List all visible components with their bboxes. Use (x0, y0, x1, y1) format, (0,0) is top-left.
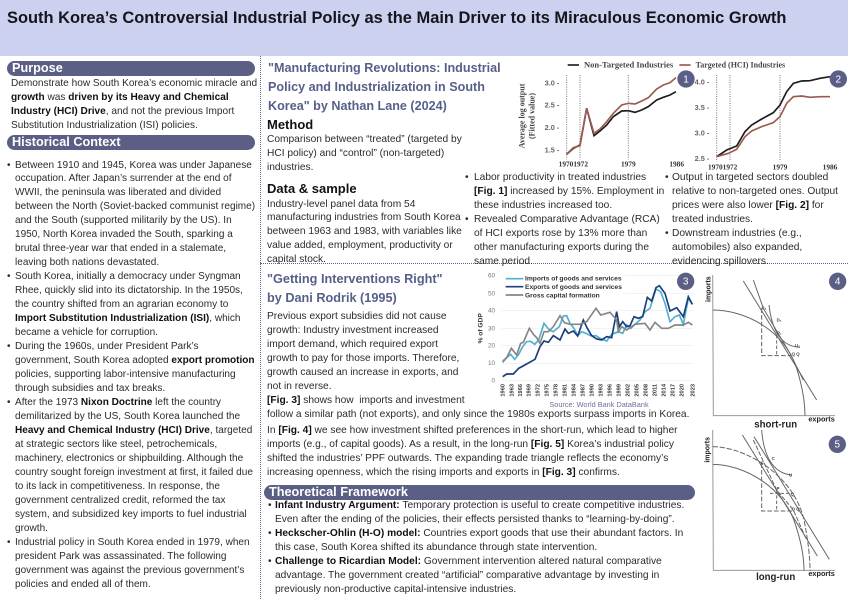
figure 2: output: 1979 (773, 162, 788, 171)
study title: by Dani Rodrik (1995) (267, 291, 397, 305)
panel: Rodrik 1995 study (267, 272, 689, 478)
figure 2: output: 1986 (823, 162, 838, 171)
year axis labels: 2020 (679, 384, 685, 397)
findings text: figure 2: relative to non-targeted ones. Output (672, 186, 838, 197)
figure 1: average log output: 1.5 - (545, 146, 560, 155)
point labels: P (777, 486, 780, 491)
explanation text: Previous export subsidies did not cause (267, 311, 447, 322)
findings text: figure 1: same period. (474, 256, 533, 267)
figure 1: average log output: Average log output (517, 83, 526, 148)
data and sample text: Industry-level panel data from 54 (267, 198, 415, 210)
heading: method: Method (267, 117, 313, 132)
axis label: exports: exports (808, 415, 835, 424)
findings text: figure 1: Revealed Comparative Advantage (RCA) (474, 214, 660, 225)
theory bullet list: • (268, 556, 272, 567)
data and sample text (267, 198, 462, 265)
historical context bullet list: • (7, 341, 11, 352)
year axis labels: 2008 (643, 384, 649, 397)
badge 3 (677, 273, 694, 290)
findings text: figure 2: evidencing spillovers. (672, 256, 769, 267)
source note: Source: World Bank DataBank (549, 400, 649, 409)
theory bullet list: this case, South Korea shifted its abundance through state intervention. (275, 542, 597, 553)
method text: industries. (267, 162, 313, 172)
historical context bullet list: president Park was assassinated. The following (15, 551, 226, 562)
figure 1: average log output (517, 75, 684, 168)
heading: data and sample: Data & sample (267, 180, 357, 196)
findings text: figure 2: Output in targeted sectors doubled (672, 172, 828, 183)
historical context bullet list: WWII, the peninsula was liberated and divided (15, 187, 221, 198)
figure explanation text: In [Fig. 4] we see how investment shifted preferences in the short-run, which lead to higher (267, 425, 678, 436)
point labels (762, 305, 800, 357)
heading: theoretical framework: Theoretical Framework (269, 485, 408, 499)
purpose text: Substitution Industrialization (ISI) policies. (11, 120, 198, 131)
theory bullet list: Challenge to Ricardian Model: Government intervention altered natural comparative (275, 556, 662, 567)
point labels: Q Q (792, 507, 800, 512)
study title: Policy and Industrialization in South (268, 80, 485, 94)
historical context bullet list: Between 1910 and 1945, Korea was under Japanese (15, 160, 252, 170)
year axis labels: 2014 (661, 383, 667, 397)
figure 1: average log output: 1979 (621, 159, 636, 168)
figure 5: long-run PPF diagram (704, 430, 846, 583)
year axis labels: 1978 (553, 384, 559, 397)
study title: Korea" by Nathan Lane (2024) (268, 99, 447, 113)
historical context bullet list: the country shifted from an agrarian economy to (15, 299, 228, 310)
purpose text: growth was driven by its Heavy and Chemical (11, 92, 229, 103)
figure 3: trade and investment share of GDP: 50 (488, 290, 495, 297)
point labels: D₁ (777, 318, 782, 323)
header banner with title (0, 0, 848, 56)
year axis labels: 2017 (670, 384, 676, 397)
badge 3: 3 (683, 277, 689, 288)
panel: theoretical framework (264, 485, 695, 595)
explanation text: follow a similar path (not exports), and only since the 1980s exports surpass imports in Korea. (267, 409, 689, 420)
figure 2: output: 3.0 - (695, 129, 710, 138)
axis label: imports: imports (705, 276, 712, 302)
point labels: U (789, 473, 792, 478)
figure 3: trade and investment share of GDP: 0 (491, 378, 495, 385)
findings text: figure 2: automobiles) also expanded, (672, 242, 802, 253)
year axis labels: 1966 (518, 384, 524, 397)
theory bullet list: • (268, 528, 272, 539)
historical context bullet list: demilitarized by the US, South Korea launched the (15, 411, 240, 422)
findings text: figure 2: • (665, 228, 669, 239)
heading: purpose (7, 61, 255, 76)
explanation text: not in reverse. (267, 381, 332, 392)
chart legend: Targeted (HCI) Industries (696, 61, 785, 70)
heading: theoretical framework (264, 485, 695, 500)
figure 3: trade and investment share of GDP: 60 (488, 273, 495, 280)
figure 3: trade and investment share of GDP: % of GDP (478, 313, 485, 343)
badge 1: 1 (683, 74, 689, 85)
year axis labels (501, 383, 696, 397)
method text: HCI policy) and “control” (non-targeted) (267, 148, 444, 158)
findings text: figure 2: treated industries. (672, 214, 753, 225)
theory bullet list: previously non-productive capital-intensive industries. (275, 584, 516, 595)
historical context bullet list: Heavy and Chemical Industry (HCI) Drive, targeted (15, 425, 252, 436)
chart legend: Gross capital formation (525, 292, 600, 299)
point labels (761, 456, 800, 512)
figure 1: average log output: 2.0 - (545, 123, 560, 132)
point labels: Q Q (792, 352, 800, 357)
title: South Korea’s Controversial Industrial Policy as the Main Driver to its Miraculous Economic Growth (7, 9, 786, 27)
badge 5: 5 (835, 440, 841, 451)
point labels: C (772, 456, 775, 461)
caption: long-run: long-run (756, 572, 795, 583)
figure 1: average log output: 1986 (669, 159, 684, 168)
figure 2: output: 4.0 - (695, 78, 710, 87)
figure 2: output (695, 75, 838, 171)
historical context bullet list: government centralized credit, reformed the tax (15, 495, 226, 506)
findings text: figure 1 (465, 172, 664, 267)
figure 1: average log output: 19701972 (559, 159, 588, 168)
historical context bullet list: policies and ended all of them. (15, 579, 151, 590)
study title (268, 60, 501, 113)
explanation text: import demand, which required export (267, 339, 438, 350)
findings text: figure 1: • (465, 214, 469, 225)
purpose text (11, 78, 257, 131)
line charts: figures 1 and 2 (517, 60, 847, 171)
historical context bullet list: • (7, 537, 11, 548)
badge 1 (677, 70, 695, 88)
findings text: figure 2: prices were also lower [Fig. 2] for (672, 200, 824, 211)
figure 1: average log output: 3.0 - (545, 78, 560, 87)
findings text: figure 1: of HCI exports rose by 13% more than (474, 228, 647, 239)
year axis labels: 1999 (616, 384, 622, 397)
findings text: figure 2: • (665, 172, 669, 183)
year axis labels: 1993 (598, 384, 604, 397)
historical context bullet list: During the 1960s, under President Park’s (15, 341, 199, 352)
figure 3: trade and investment share of GDP (478, 272, 696, 409)
method text: Comparison between “treated” (targeted by (267, 134, 462, 144)
historical context bullet list: 1950, North Korea invaded the South, sparking a (15, 229, 233, 240)
theory bullet list: advantage. The government created “artificial” comparative advantage by investing in (275, 570, 659, 581)
data and sample text: manufacturing industries from South Korea (267, 212, 461, 223)
chart legend: Non-Targeted Industries (584, 60, 674, 70)
heading: historical context: Historical Context (12, 135, 121, 149)
point labels: P₁ (777, 330, 782, 335)
figure 2: output: 3.5 - (695, 103, 710, 112)
year axis labels: 1996 (607, 384, 613, 397)
data and sample text: value added, employment, productivity or (267, 240, 453, 251)
year axis labels: 1969 (526, 384, 532, 397)
historical context bullet list: growth. (15, 523, 48, 534)
figure explanation text: increasing openness, which the rising imports and exports in [Fig. 3] confirms. (267, 467, 620, 478)
figure 3: trade and investment share of GDP: 10 (488, 360, 495, 367)
data and sample text: capital stock. (267, 254, 326, 265)
historical context bullet list (7, 160, 255, 590)
historical context bullet list: to its lack in competitiveness. In response, the (15, 481, 220, 492)
panel: purpose and historical context (7, 61, 257, 590)
year axis labels: 2011 (652, 384, 658, 396)
heading: purpose: Purpose (12, 61, 63, 75)
historical context bullet list: • (7, 160, 11, 170)
historical context bullet list: • (7, 397, 11, 408)
year axis labels: 1960 (501, 384, 507, 397)
historical context bullet list: occupation. After Japan’s surrender at the end of (15, 173, 232, 184)
badge 4 (829, 273, 846, 290)
findings text: figure 2 (665, 172, 838, 267)
point labels: C₁ (762, 305, 767, 310)
figure explanation text: shifted the industries’ PPF outwards. The expanding trade triangle reflects the economy’s (267, 453, 668, 464)
historical context bullet list: and the South (supported militarily by the US). In (15, 215, 232, 226)
historical context bullet list: system, and subsidized key imports to fuel industrial (15, 509, 247, 520)
figure 4: short-run PPF diagram (705, 272, 846, 430)
year axis labels: 2023 (690, 384, 696, 397)
axis label: imports: imports (704, 437, 711, 463)
historical context bullet list: country sought foreign investment at first, it failed due (15, 467, 253, 478)
explanation text (267, 311, 689, 420)
axis label: exports: exports (808, 569, 835, 578)
figure explanation text: imports (e.g., of capital goods). As a result, in the long-run [Fig. 5] Korea’s industrial policy (267, 439, 674, 450)
theory bullet list: Even after the ending of the policies, their effects persisted thanks to “learning-by-doing”. (275, 514, 675, 525)
point labels: C (761, 460, 764, 465)
year axis labels: 1990 (589, 384, 595, 397)
figure 1: average log output: 2.5 - (545, 101, 560, 110)
heading: historical context (7, 135, 255, 150)
figure 1: average log output: (Fitted value) (528, 93, 537, 139)
chart legend (503, 273, 625, 299)
badge 2 (830, 70, 847, 88)
historical context bullet list: government, South Korea adopted export promotion (15, 355, 255, 366)
study title: "Getting Interventions Right" (267, 272, 443, 286)
historical context bullet list: policies, supporting labor-intensive manufacturing (15, 369, 236, 380)
historical context bullet list: through subsidies and tax breaks. (15, 383, 165, 394)
findings text: figure 2: Downstream industries (e.g., (672, 228, 802, 239)
year axis labels: 2002 (625, 384, 631, 397)
historical context bullet list: between the North (Soviet-backed communist regime) (15, 201, 255, 212)
explanation text: growth to pay for those imports. Therefore, (267, 353, 459, 364)
theory bullet list: Heckscher-Ohlin (H-O) model: Countries export goods that use their abundant factors. In (275, 528, 683, 539)
findings text: figure 1: other manufacturing exports during the (474, 242, 649, 253)
historical context bullet list: machinery, electronics or shipbuilding. Although the (15, 453, 243, 464)
badge 5 (829, 436, 846, 453)
explanation text: growth caused an increase in exports, and (267, 367, 458, 378)
historical context bullet list: Rhee, quickly slid into its dictatorship. In the 1950s, (15, 285, 243, 296)
chart legend (568, 60, 785, 70)
findings text: figure 1: these industries increased too. (474, 200, 612, 211)
figure explanation text (267, 425, 678, 478)
historical context bullet list: government was against the previous government’s (15, 565, 244, 576)
figure 2: output: 19701972 (708, 162, 738, 171)
historical context bullet list: brutal three-year war that ended in a stalemate, (15, 243, 226, 254)
year axis labels: 1981 (562, 384, 568, 397)
historical context bullet list: Industrial policy in South Korea ended in 1979, when (15, 537, 250, 548)
badge 4: 4 (835, 277, 841, 288)
year axis labels: 2005 (634, 384, 640, 397)
badge 2: 2 (836, 74, 842, 85)
figure 2: output: 2.5 - (695, 154, 710, 163)
historical context bullet list: became a vehicle for corruption. (15, 327, 158, 338)
data and sample text: between 1963 and 1983, with variables like (267, 226, 462, 237)
chart legend: Imports of goods and services (525, 276, 622, 283)
theory bullet list (268, 500, 684, 595)
method text (267, 134, 462, 172)
year axis labels: 1963 (509, 384, 515, 397)
theory bullet list: Infant Industry Argument: Temporary protection is useful to create competitive industries. (275, 500, 684, 511)
figure 3: trade and investment share of GDP: 40 (488, 308, 495, 315)
purpose text: Industry (HCI) Drive, and not the previous Import (11, 106, 234, 117)
chart legend: Exports of goods and services (525, 284, 622, 291)
year axis labels: 1987 (580, 384, 586, 397)
panel: Lane 2024 study (267, 60, 501, 265)
findings text: figure 1: [Fig. 1] increased by 15%. Employment in (474, 186, 664, 197)
explanation text: [Fig. 3] shows how imports and investment (267, 395, 465, 406)
study title (267, 272, 443, 305)
figure 3: trade and investment share of GDP: 30 (488, 325, 495, 332)
purpose text: Demonstrate how South Korea’s economic miracle and (11, 78, 257, 89)
point labels: Q (791, 491, 795, 496)
point labels: U₁ (795, 343, 800, 348)
year axis labels: 1972 (535, 384, 541, 397)
theory bullet list: • (268, 500, 272, 511)
historical context bullet list: • (7, 271, 11, 282)
figure 3: trade and investment share of GDP: 20 (488, 343, 495, 350)
year axis labels: 1975 (544, 384, 550, 397)
findings text: figure 1: • (465, 172, 469, 183)
study title: "Manufacturing Revolutions: Industrial (268, 60, 501, 74)
historical context bullet list: Import Substitution Industrialization (ISI), which (15, 313, 241, 324)
historical context bullet list: South Korea, initially a democracy under Syngman (15, 271, 241, 282)
explanation text: growth: Industry investment increased (267, 325, 439, 336)
findings text: figure 1: Labor productivity in treated industries (474, 172, 646, 183)
historical context bullet list: at strategic sectors like steel, petrochemicals, (15, 439, 217, 450)
caption: short-run: short-run (754, 419, 797, 430)
historical context bullet list: After the 1973 Nixon Doctrine left the country (15, 397, 221, 408)
year axis labels: 1984 (571, 383, 577, 397)
historical context bullet list: leaving both nations devastated. (15, 257, 159, 268)
